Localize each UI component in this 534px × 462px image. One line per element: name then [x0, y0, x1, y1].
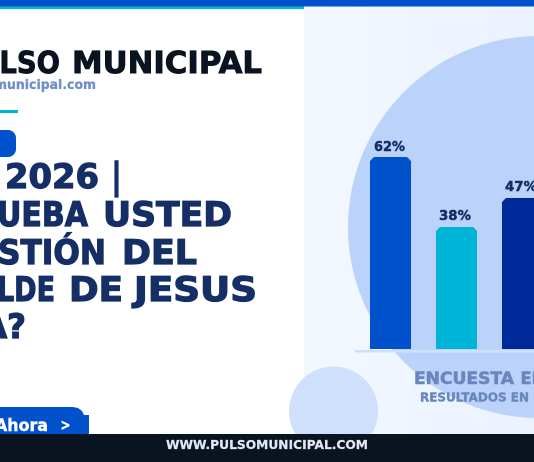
footer: WWW.PULSOMUNICIPAL.COM — [166, 438, 368, 452]
large background circle — [348, 36, 534, 418]
title: | — [113, 157, 120, 196]
title: DE — [69, 270, 123, 309]
small background circle — [289, 366, 378, 456]
tag pill — [0, 130, 16, 157]
bar: 47% — [502, 179, 534, 349]
title: UEBA — [0, 195, 88, 234]
bar: 38% — [436, 208, 477, 349]
accent line — [0, 110, 18, 113]
survey caption: RESULTADOS EN — [420, 390, 529, 404]
bar: 38%: 38% — [439, 208, 471, 224]
bar: 62%: 62% — [374, 139, 405, 155]
title: DEL — [122, 233, 197, 272]
logo heading: MUNICIPAL — [72, 46, 262, 81]
chart baseline — [355, 350, 534, 352]
bar chart — [355, 139, 534, 352]
footer — [0, 434, 534, 462]
panel: right survey background — [289, 0, 534, 456]
title: 2026 — [5, 157, 99, 196]
title: STIÓN — [0, 232, 106, 272]
bar: 62% — [370, 139, 411, 349]
title — [0, 157, 257, 346]
title: JESUS — [132, 270, 257, 309]
button: > — [60, 416, 70, 434]
survey caption — [414, 369, 534, 404]
top bar — [0, 0, 534, 9]
title: USTED — [103, 195, 232, 234]
survey caption: ENCUESTA — [414, 369, 514, 388]
button — [0, 407, 89, 435]
